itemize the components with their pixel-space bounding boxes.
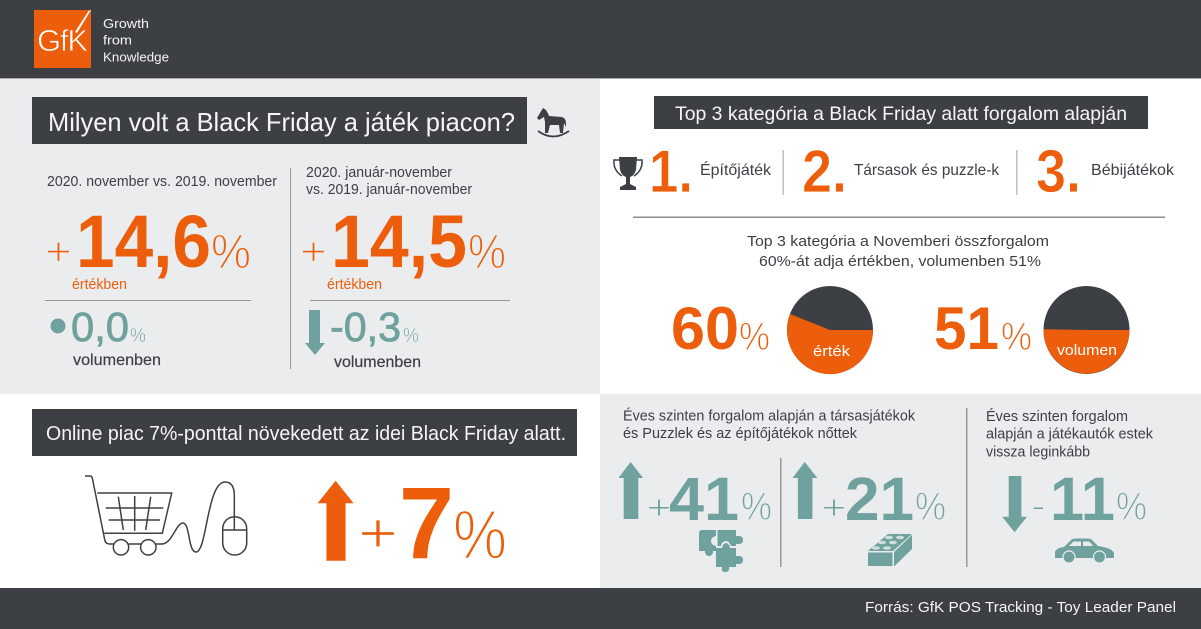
- value growth 14,6%: [45, 200, 251, 293]
- text block: vissza leginkább: [986, 444, 1090, 460]
- text block: [986, 408, 1153, 460]
- text block: yearly growth: [623, 408, 915, 442]
- chart: 60% value pie: %: [739, 316, 770, 359]
- panel: top 3 ranking: [614, 138, 1175, 205]
- rank 2: 2.: [802, 138, 847, 205]
- arrow: up: [792, 462, 817, 519]
- rank 3: [1036, 138, 1175, 205]
- rank 2: [802, 138, 1000, 205]
- chart: 60% value pie: 60: [671, 295, 739, 362]
- text block: yearly growth: Éves szinten forgalom alapján a társasjátékok: [623, 408, 915, 424]
- stat: toy cars -11%: [986, 408, 1153, 563]
- stat: board games and puzzles +41%: 41: [669, 465, 739, 533]
- panel: November comparison: [45, 173, 277, 369]
- heading: Black Friday toy market: Milyen volt a Black Friday a játék piacon?: [48, 107, 515, 137]
- tagline: Knowledge: [103, 50, 169, 64]
- footer bar: [0, 588, 1201, 629]
- value growth 14,6%: %: [211, 226, 251, 279]
- icon: puzzle: [699, 530, 743, 572]
- header bar: [0, 0, 1201, 79]
- volume -0,3%: %: [403, 325, 419, 347]
- rank 3: Bébijátékok: [1091, 162, 1175, 179]
- tagline: Growth: [103, 16, 149, 31]
- period label: [306, 164, 472, 198]
- value growth 14,5%: értékben: [327, 276, 382, 293]
- stat: construction toys +21%: %: [915, 486, 946, 529]
- online growth +7%: %: [453, 496, 507, 574]
- stat: construction toys +21%: +: [822, 489, 846, 527]
- chart: 60% value pie: [671, 286, 873, 374]
- text block: Éves szinten forgalom: [986, 408, 1128, 425]
- value growth 14,6%: 14,6: [76, 200, 211, 283]
- rank 1: 1.: [649, 138, 693, 205]
- heading: Black Friday toy market: [32, 97, 527, 144]
- online growth +7%: [318, 466, 507, 580]
- value growth 14,5%: 14,5: [331, 200, 467, 283]
- arrow: down: [1002, 476, 1027, 532]
- GfK logo: [34, 10, 91, 68]
- stat: toy cars -11%: 11: [1050, 465, 1115, 533]
- rank 1: [649, 138, 772, 205]
- rank 1: Építőjáték: [700, 160, 772, 179]
- stat: board games and puzzles +41%: +: [646, 489, 672, 527]
- volume -0,3%: volumenben: [334, 354, 421, 371]
- stat: construction toys +21%: [792, 462, 946, 566]
- rank 2: Társasok és puzzle-k: [854, 162, 1000, 179]
- volume 0,0%: %: [130, 325, 146, 347]
- volume 0,0%: volumenben: [73, 352, 161, 369]
- icon: toy brick: [868, 534, 912, 566]
- heading: online market: [32, 409, 577, 456]
- volume -0,3%: -0,3: [330, 304, 401, 350]
- chart: 51% volume pie: [934, 286, 1130, 374]
- value growth 14,6%: értékben: [72, 276, 127, 293]
- GfK logo: GfK: [37, 23, 88, 58]
- arrow: up: [618, 462, 643, 519]
- text block: top 3 share: [747, 233, 1049, 270]
- volume 0,0%: 0,0: [71, 304, 129, 350]
- online growth +7%: 7: [399, 466, 454, 580]
- value growth 14,5%: [300, 200, 506, 293]
- text block: top 3 share: Top 3 kategória a Novemberi összforgalom: [747, 233, 1049, 250]
- stat: construction toys +21%: 21: [845, 465, 914, 533]
- tagline: [103, 16, 169, 64]
- heading: top 3 categories: Top 3 kategória a Black Friday alatt forgalom alapján: [675, 103, 1127, 125]
- text block: yearly growth: és Puzzlek és az építőjátékok nőttek: [623, 425, 857, 442]
- value growth 14,6%: +: [45, 230, 72, 274]
- icon: rocking horse: [537, 108, 569, 136]
- panel: January-November comparison: [300, 164, 510, 371]
- icon: shopping cart with mouse: [85, 476, 247, 555]
- arrow: up: [318, 481, 354, 561]
- text block: alapján a játékautók estek: [986, 426, 1153, 442]
- volume -0,3%: [305, 304, 421, 371]
- period label: 2020. november vs. 2019. november: [47, 173, 277, 190]
- stat: board games and puzzles +41%: %: [741, 486, 772, 529]
- tagline: from: [103, 32, 132, 48]
- chart: 51% volume pie: 51: [934, 295, 999, 362]
- online growth +7%: +: [358, 501, 398, 564]
- period label: vs. 2019. január-november: [306, 181, 472, 198]
- stat: toy cars -11%: %: [1116, 486, 1147, 529]
- heading: top 3 categories: [654, 96, 1148, 129]
- chart: 60% value pie: érték: [813, 343, 851, 360]
- period label: 2020. január-november: [306, 164, 452, 181]
- value growth 14,5%: %: [468, 226, 506, 279]
- stat: board games and puzzles +41%: [618, 462, 772, 572]
- volume 0,0%: [50, 304, 161, 369]
- value growth 14,5%: +: [300, 230, 327, 274]
- chart: 51% volume pie: volumen: [1057, 342, 1117, 359]
- icon: car: [1055, 538, 1114, 563]
- rank 3: 3.: [1036, 138, 1081, 205]
- chart: 51% volume pie: %: [1001, 316, 1032, 359]
- text block: top 3 share: 60%-át adja értékben, volumenben 51%: [759, 253, 1041, 270]
- icon: trophy: [614, 157, 642, 190]
- footer bar: Forrás: GfK POS Tracking - Toy Leader Panel: [865, 599, 1176, 616]
- heading: online market: Online piac 7%-ponttal növekedett az idei Black Friday alatt.: [46, 423, 566, 445]
